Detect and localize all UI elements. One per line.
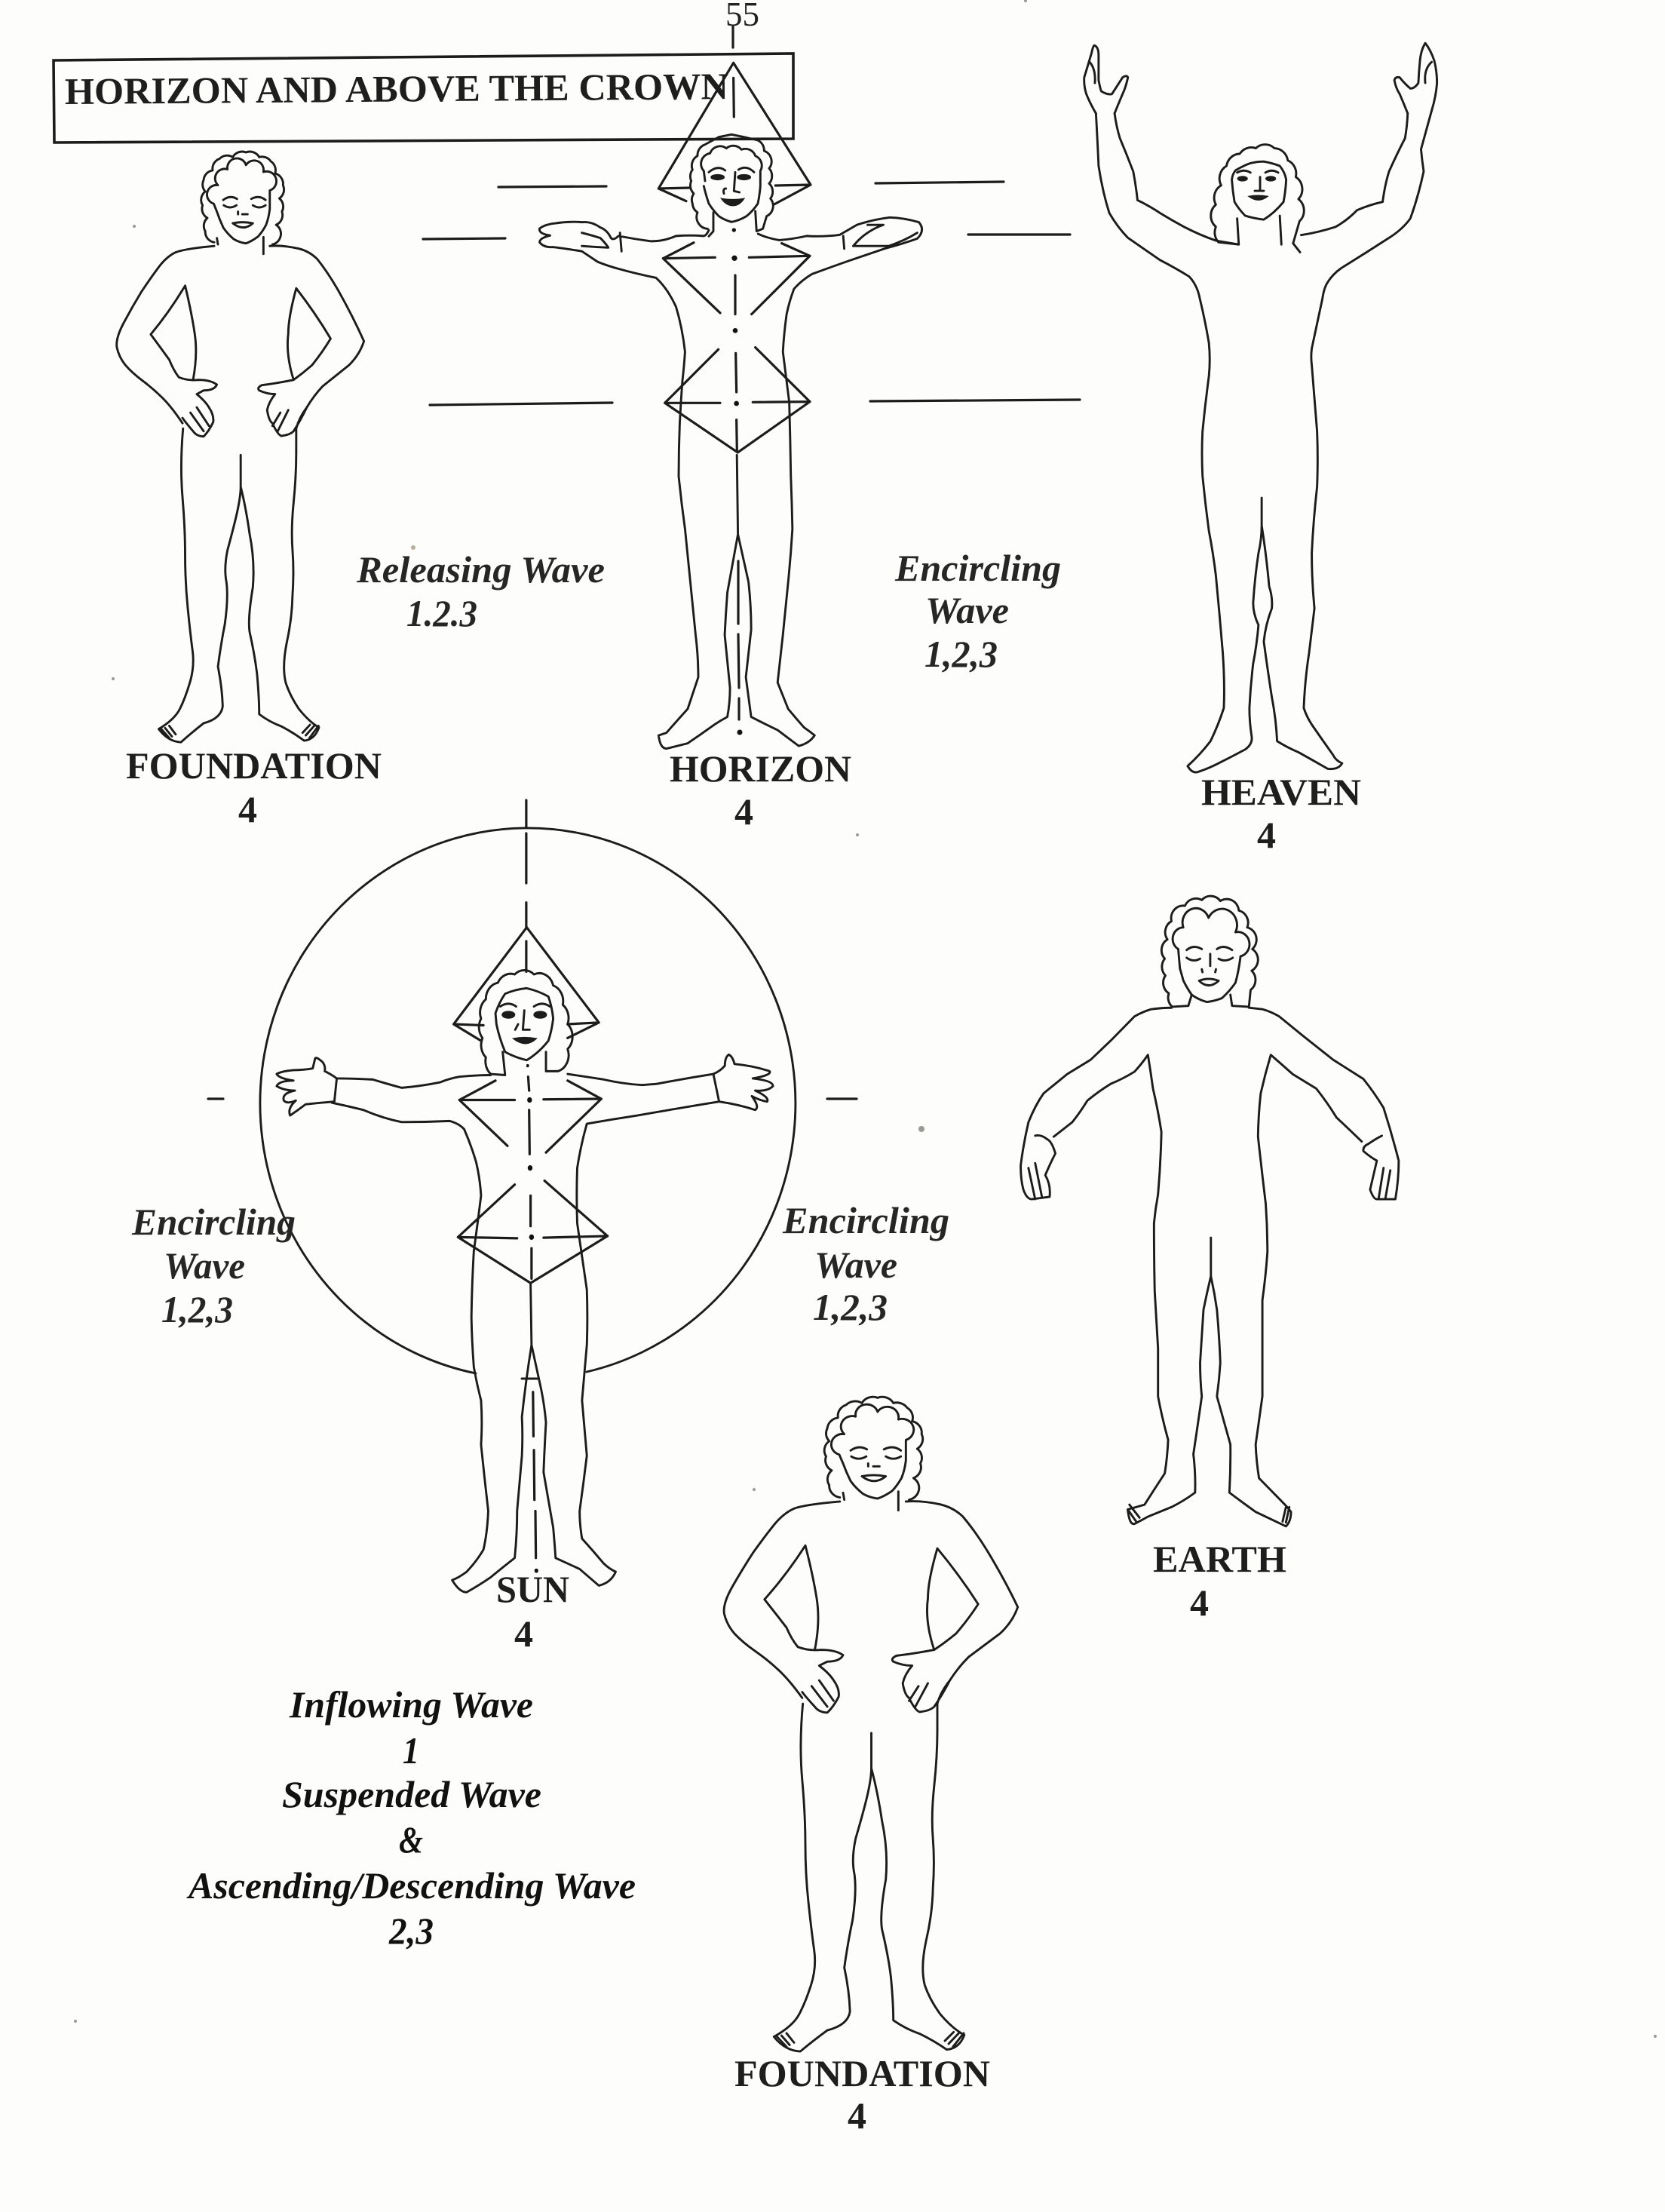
text: encircling wave right: 1,2,3 [813, 1286, 888, 1328]
label: earth: EARTH [1153, 1538, 1286, 1580]
text: encircling wave right: Encircling [782, 1199, 949, 1241]
foundation toes [161, 725, 318, 738]
label: earth: 4 [1190, 1582, 1209, 1624]
text: releasing wave: 1.2.3 [406, 592, 477, 634]
sun right hand [713, 1054, 773, 1110]
lower foundation body [724, 1502, 1018, 2051]
foundation body [117, 246, 364, 742]
sun body [332, 1074, 719, 1592]
text: encircling wave right [782, 1199, 949, 1328]
text: inflowing, suspended and ascending descending waves: Inflowing Wave [289, 1683, 533, 1726]
text: encircling wave right: Wave [814, 1244, 897, 1286]
label: foundation top [126, 744, 382, 830]
earth hair [1161, 896, 1258, 1007]
blank line left 2 [423, 238, 505, 239]
text: encircling wave upper right: Wave [925, 589, 1009, 631]
title text: HORIZON AND ABOVE THE CROWN [65, 65, 728, 112]
text: inflowing, suspended and ascending descending waves: Ascending/Descending Wave [186, 1864, 636, 1907]
text: encircling wave upper right: Encircling [894, 547, 1061, 589]
foundation hair [201, 152, 284, 244]
text: encircling wave left: Encircling [131, 1201, 296, 1243]
text: inflowing, suspended and ascending descending waves: & [399, 1818, 423, 1861]
heaven hair [1211, 145, 1304, 244]
horizon lower axis and top tick [733, 26, 742, 735]
text: encircling wave left: 1,2,3 [161, 1288, 233, 1330]
text: encircling wave upper right [894, 547, 1061, 675]
figure: foundation top left [117, 152, 364, 742]
sun outline [277, 970, 773, 1592]
figure: foundation lower right [724, 1397, 1018, 2051]
blank line left 3 [430, 403, 612, 405]
horizon head and face [690, 134, 773, 236]
label: horizon: HORIZON [670, 747, 851, 790]
earth face [1173, 908, 1250, 1002]
text: inflowing, suspended and ascending descending waves: 1 [403, 1729, 419, 1772]
text: encircling wave left: Wave [164, 1244, 245, 1287]
label: foundation lower: 4 [848, 2094, 866, 2137]
horizon geometry: triangle and diamonds with central axis [658, 63, 811, 453]
label: sun: SUN [496, 1568, 569, 1610]
sun side tick left [208, 1097, 223, 1100]
label: earth [1153, 1538, 1286, 1624]
label: foundation lower: FOUNDATION [734, 2052, 990, 2094]
title box [54, 54, 793, 143]
sun face [495, 988, 553, 1060]
blank line right 1 [875, 182, 1004, 183]
lower foundation face [831, 1404, 914, 1511]
sun side tick right [827, 1097, 857, 1100]
figure: horizon [539, 217, 922, 749]
text: encircling wave left [131, 1201, 296, 1330]
label: horizon [670, 747, 851, 833]
earth toes [1128, 1505, 1289, 1523]
figure: heaven [1084, 43, 1437, 772]
label: foundation lower [734, 2052, 990, 2137]
label: sun [496, 1568, 569, 1655]
blank line left 1 [498, 186, 606, 187]
heaven hands [1084, 43, 1437, 113]
label: heaven [1201, 771, 1361, 856]
blank line right 2 [968, 233, 1070, 236]
heaven body [1096, 111, 1432, 772]
foundation face [207, 158, 277, 254]
figure: earth [1021, 896, 1399, 1526]
heaven face [1232, 161, 1286, 219]
lower foundation hair [824, 1397, 923, 1500]
lower foundation toes [777, 2032, 964, 2047]
label: horizon: 4 [734, 790, 753, 833]
text: inflowing, suspended and ascending descending waves [186, 1683, 636, 1952]
sun hair [479, 970, 572, 1075]
text: releasing wave: Releasing Wave [356, 548, 605, 591]
text: inflowing, suspended and ascending descending waves: 2,3 [388, 1910, 434, 1952]
text: encircling wave upper right: 1,2,3 [924, 633, 998, 675]
label: foundation top: 4 [238, 788, 257, 830]
text: releasing wave [356, 548, 605, 634]
label: foundation top: FOUNDATION [126, 744, 382, 787]
label: heaven: 4 [1257, 814, 1276, 856]
text: inflowing, suspended and ascending descending waves: Suspended Wave [282, 1773, 541, 1815]
label: heaven: HEAVEN [1201, 771, 1361, 813]
sun left hand [277, 1058, 337, 1115]
sun geometry [454, 800, 608, 1573]
sun circle [260, 828, 796, 1379]
earth body [1021, 1008, 1399, 1526]
label: sun: 4 [514, 1612, 533, 1655]
blank line right 3 [870, 400, 1080, 401]
horizon body [539, 217, 922, 749]
figure: sun [208, 800, 857, 1592]
